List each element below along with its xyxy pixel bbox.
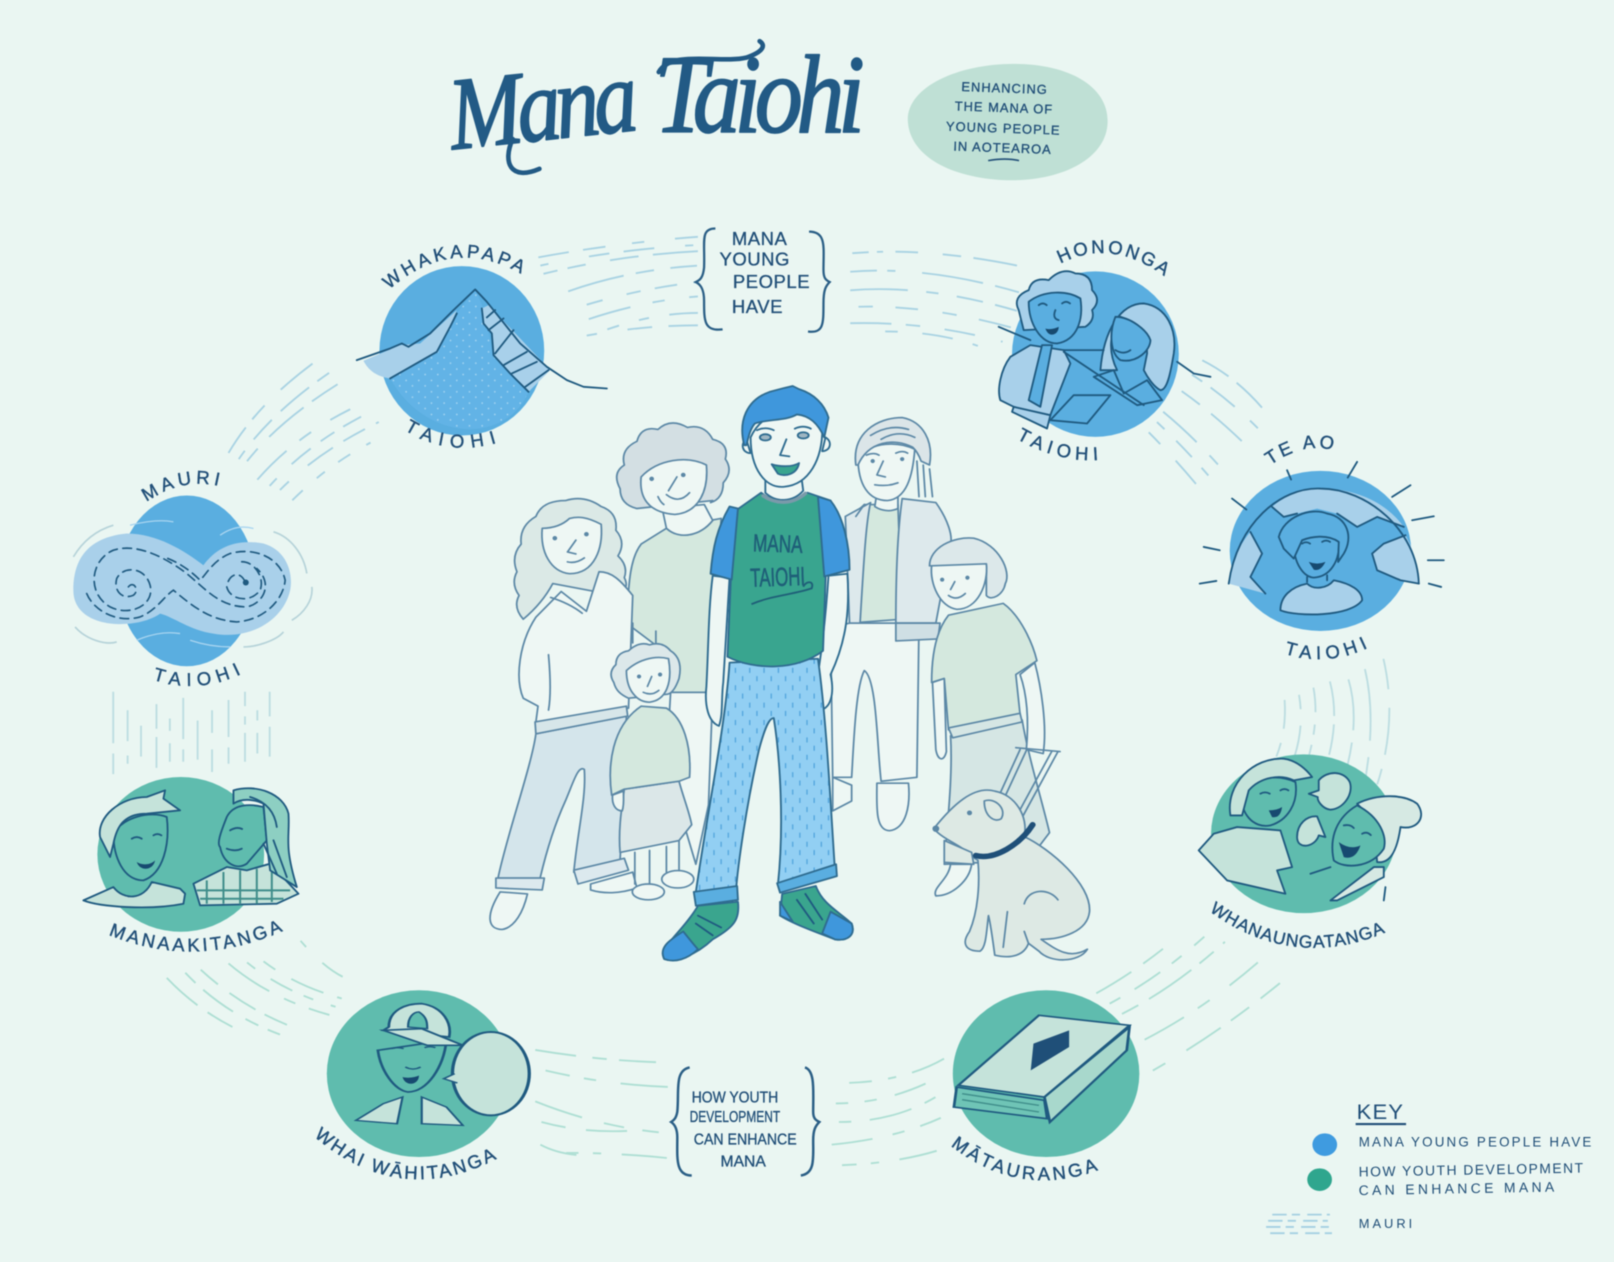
- panel: whai wahitanga: [316, 990, 532, 1180]
- icon: two people with laptop: [999, 271, 1210, 437]
- callout: tagline blob: YOUNG PEOPLE: [946, 119, 1061, 138]
- label: te ao: TE AO: [1262, 434, 1334, 464]
- mauri flow lines: bottom right: [832, 1058, 945, 1165]
- mauri flow lines: top left: [538, 237, 698, 336]
- person: girl with bob and guide dog handle: [930, 538, 1060, 864]
- panel: hononga: [997, 239, 1212, 462]
- key item: how youth development can enhance mana: CAN ENHANCE MANA: [1358, 1179, 1555, 1198]
- label: taiohi: TAIOHI: [1020, 426, 1098, 462]
- panel: mauri: [72, 470, 314, 687]
- key item: mana young people have: MANA YOUNG PEOPLE HAVE: [1359, 1135, 1591, 1150]
- label: taiohi: TAIOHI: [408, 418, 496, 449]
- label: matauranga: MĀTAURANGA: [951, 1136, 1099, 1182]
- mauri flow lines: top right: [850, 252, 1019, 346]
- key: [1266, 1099, 1591, 1233]
- callout: tagline blob: [908, 64, 1108, 180]
- key item: mana young people have: [1312, 1133, 1591, 1156]
- bracket label: mana young people have: YOUNG: [720, 249, 790, 270]
- callout: tagline blob: ENHANCING: [961, 79, 1048, 97]
- person: small child: [610, 644, 694, 900]
- title: Mana: [442, 39, 640, 172]
- label: hononga: HONONGA: [1056, 239, 1168, 277]
- icon: mountain in circle: [357, 266, 607, 436]
- central group of people: [490, 386, 1090, 961]
- icon: two people talking: [83, 777, 298, 932]
- bracket label: mana young people have: [696, 228, 830, 332]
- bracket label: mana young people have: MANA: [732, 228, 788, 249]
- bracket label: how youth development can enhance mana: [671, 1067, 819, 1176]
- callout: tagline blob: IN AOTEAROA: [953, 139, 1052, 157]
- mauri flow lines: manaakitanga to whai wahitanga: [167, 941, 350, 1040]
- t-shirt lettering: MANA: [752, 530, 803, 559]
- person: woman with curly hair: [617, 423, 729, 864]
- key item: mauri: MAURI: [1359, 1216, 1412, 1231]
- mauri flow lines: hononga to te ao: [1149, 360, 1262, 494]
- icon: globe with person: [1200, 462, 1444, 631]
- person: young person in mana taiohi t-shirt: [663, 386, 853, 961]
- icon: infinity swirl: [73, 496, 312, 666]
- bracket label: how youth development can enhance mana: MANA: [721, 1153, 767, 1170]
- panel: matauranga: [951, 990, 1140, 1182]
- t-shirt lettering: [750, 530, 806, 593]
- icon: young person with cap and speech bubble: [327, 990, 529, 1157]
- bracket label: how youth development can enhance mana: DEVELOPMENT: [690, 1109, 781, 1126]
- person: man with dreadlocks: [831, 418, 951, 831]
- title: [442, 34, 862, 173]
- label: manaakitanga: MANAAKITANGA: [109, 920, 284, 953]
- label: whakapapa: WHAKAPAPA: [380, 244, 524, 288]
- mauri flow lines: whanaungatanga to matauranga: [1096, 932, 1289, 1071]
- mauri flow lines: bottom left: [535, 1050, 669, 1158]
- panel: manaakitanga: [82, 776, 300, 953]
- guide dog: [933, 790, 1090, 960]
- mauri flow lines: mauri to manaakitanga: [113, 692, 270, 777]
- t-shirt swirl: [751, 582, 812, 604]
- person: woman with long wavy hair: [490, 499, 637, 929]
- key item: mauri: [1266, 1215, 1412, 1233]
- label: taiohi: TAIOHI: [1286, 636, 1368, 660]
- panel: te ao: [1198, 434, 1446, 660]
- key item: how youth development can enhance mana: HOW YOUTH DEVELOPMENT: [1358, 1160, 1584, 1180]
- t-shirt lettering: TAIOHI: [750, 562, 806, 593]
- title: Taiohi: [655, 34, 862, 157]
- panel: whanaungatanga: [1197, 754, 1423, 949]
- key heading: KEY: [1357, 1099, 1404, 1124]
- bracket label: mana young people have: HAVE: [732, 296, 783, 317]
- panel: whakapapa: [355, 244, 608, 449]
- label: mauri: MAURI: [140, 470, 220, 502]
- label: taiohi: TAIOHI: [155, 662, 240, 687]
- key item: how youth development can enhance mana: [1307, 1160, 1584, 1198]
- bracket label: how youth development can enhance mana: CAN ENHANCE: [694, 1132, 797, 1149]
- bracket label: how youth development can enhance mana: HOW YOUTH: [692, 1089, 778, 1106]
- mauri flow lines: te ao to whanaungatanga: [1276, 659, 1389, 793]
- label: whanaungatanga: WHANAUNGATANGA: [1211, 900, 1386, 949]
- icon: book: [953, 990, 1139, 1157]
- label: whai wahitanga: WHAI WĀHITANGA: [316, 1126, 498, 1180]
- bracket label: mana young people have: PEOPLE: [733, 271, 810, 292]
- icon: two people with speech bubbles: [1199, 754, 1421, 913]
- mauri flow lines: whakapapa to mauri: [229, 360, 379, 500]
- callout: tagline blob: THE MANA OF: [954, 98, 1053, 117]
